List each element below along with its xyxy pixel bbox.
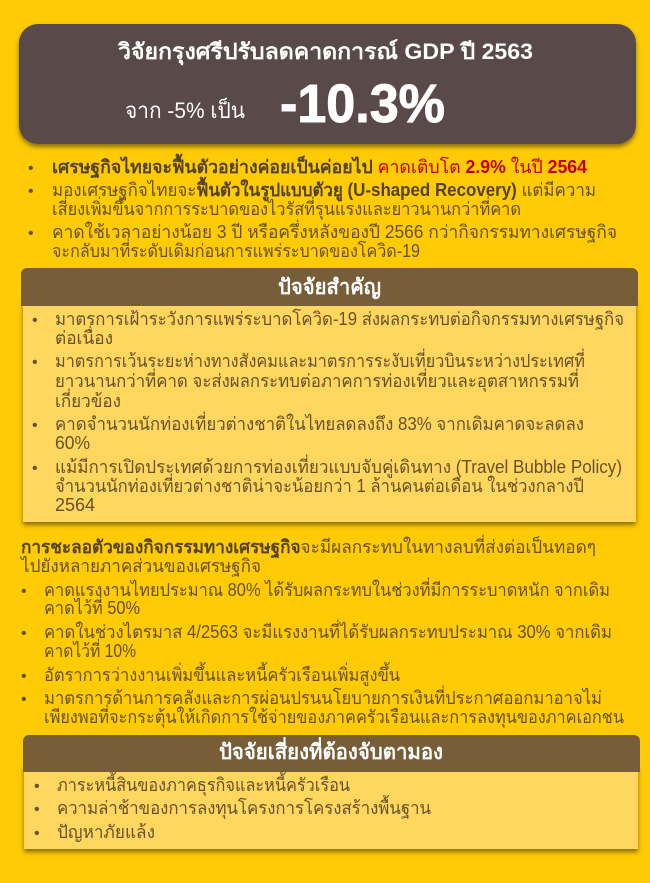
risk factors list: ภาระหนี้สินของภาคธุรกิจและหนี้ครัวเรือน: [57, 772, 350, 796]
text block: outlook bullets: [28, 153, 617, 261]
panel: risk factors: [23, 735, 640, 849]
text block: outlook bullets: มองเศรษฐกิจไทยจะฟื้นตัวในรูปแบบตัวยู (U-shaped Recovery) แต่มีความ: [52, 176, 596, 202]
title: วิจัยกรุงศรีปรับลดคาดการณ์ GDP ปี 2563: [117, 39, 533, 66]
key factors list: [32, 308, 624, 515]
risk factors heading: ปัจจัยเสี่ยงที่ต้องจับตามอง: [219, 736, 443, 764]
risk factors list: [34, 772, 431, 842]
text block: economic slowdown: การชะลอตัวของกิจกรรมทางเศรษฐกิจจะมีผลกระทบในทางลบที่ส่งต่อเป็นทอดๆ: [21, 534, 596, 559]
text block: economic slowdown: [19, 534, 624, 728]
risk factors header: [23, 735, 640, 772]
text block: outlook bullets: •: [28, 183, 34, 200]
key factors list: เกี่ยวข้อง: [55, 388, 121, 411]
subtitle: from -5% to: จาก -5% เป็น: [125, 96, 245, 123]
panel: headline: [19, 24, 636, 144]
panel: key factors: [21, 268, 638, 522]
key factors list: 60%: [55, 433, 90, 453]
text block: economic slowdown: อัตราการว่างงานเพิ่มขึ้นและหนี้ครัวเรือนเพิ่มสูงขึ้น: [44, 662, 400, 686]
key factors list: ยาวนานกว่าที่คาด จะส่งผลกระทบต่อภาคการท่องเที่ยวและอุตสาหกรรมที่: [55, 368, 579, 392]
key factors list: มาตรการเฝ้าระวังการแพร่ระบาดโควิด-19 ส่งผลกระทบต่อกิจกรรมทางเศรษฐกิจ: [55, 308, 624, 330]
text block: economic slowdown: •: [21, 583, 27, 600]
key factors heading: ปัจจัยสำคัญ: [278, 276, 381, 300]
key factors list: คาดจำนวนนักท่องเที่ยวต่างชาติในไทยลดลงถึง 83% จากเดิมคาดจะลดลง: [55, 411, 584, 434]
text block: outlook bullets: คาดใช้เวลาอย่างน้อย 3 ปี หรือครึ่งหลังของปี 2566 กว่ากิจกรรมทางเศรษฐกิจ: [52, 219, 617, 243]
risk factors list: •: [34, 778, 40, 795]
text block: outlook bullets: เสี่ยงเพิ่มขึ้นจากการระบาดของไวรัสที่รุนแรงและยาวนานกว่าที่คาด: [52, 196, 521, 220]
risk factors list: •: [34, 825, 40, 842]
key factors list: •: [32, 460, 38, 477]
text block: outlook bullets: จะกลับมาที่ระดับเดิมก่อนการแพร่ระบาดของโควิด-19: [52, 238, 420, 261]
big number: -10.3%: [280, 74, 445, 134]
key factors list: แม้มีการเปิดประเทศด้วยการท่องเที่ยวแบบจับคู่เดินทาง (Travel Bubble Policy): [55, 454, 622, 478]
key factors list: •: [32, 312, 38, 329]
text block: economic slowdown: คาดในช่วงไตรมาส 4/2563 จะมีแรงงานที่ได้รับผลกระทบประมาณ 30% จากเดิม: [44, 619, 612, 642]
key factors list: จำนวนนักท่องเที่ยวต่างชาติน่าจะน้อยกว่า 1 ล้านคนต่อเดือน ในช่วงกลางปี: [55, 473, 584, 496]
text block: economic slowdown: คาดแรงงานไทยประมาณ 80% ได้รับผลกระทบในช่วงที่มีการระบาดหนัก จากเดิม: [44, 577, 610, 600]
key factors list: มาตรการเว้นระยะห่างทางสังคมและมาตรการระงับเที่ยวบินระหว่างประเทศที่: [55, 348, 585, 371]
key factors list: •: [32, 354, 38, 371]
key factors list: 2564: [55, 495, 95, 515]
text block: economic slowdown: •: [21, 625, 27, 642]
text block: economic slowdown: •: [21, 691, 27, 708]
text block: economic slowdown: คาดไว้ที่ 50%: [44, 595, 140, 618]
key factors header: [21, 268, 638, 306]
risk factors list: ความล่าช้าของการลงทุนโครงการโครงสร้างพื้นฐาน: [57, 795, 431, 819]
risk factors list: •: [34, 801, 40, 818]
key factors list: •: [32, 417, 38, 434]
text block: economic slowdown: •: [21, 668, 27, 685]
key factors list: ต่อเนื่อง: [55, 325, 113, 348]
text block: economic slowdown: ไปยังหลายภาคส่วนของเศรษฐกิจ: [19, 555, 261, 577]
risk factors list: ปัญหาภัยแล้ง: [57, 822, 155, 842]
text block: outlook bullets: เศรษฐกิจไทยจะฟื้นตัวอย่างค่อยเป็นค่อยไป คาดเติบโต 2.9% ในปี 2564: [52, 153, 587, 179]
text block: outlook bullets: •: [28, 225, 34, 242]
text block: economic slowdown: มาตรการด้านการคลังและการผ่อนปรนนโยบายการเงินที่ประกาศออกมาอาจไม่: [44, 685, 602, 708]
text block: economic slowdown: คาดไว้ที่ 10%: [44, 638, 136, 661]
text block: outlook bullets: •: [28, 160, 34, 177]
